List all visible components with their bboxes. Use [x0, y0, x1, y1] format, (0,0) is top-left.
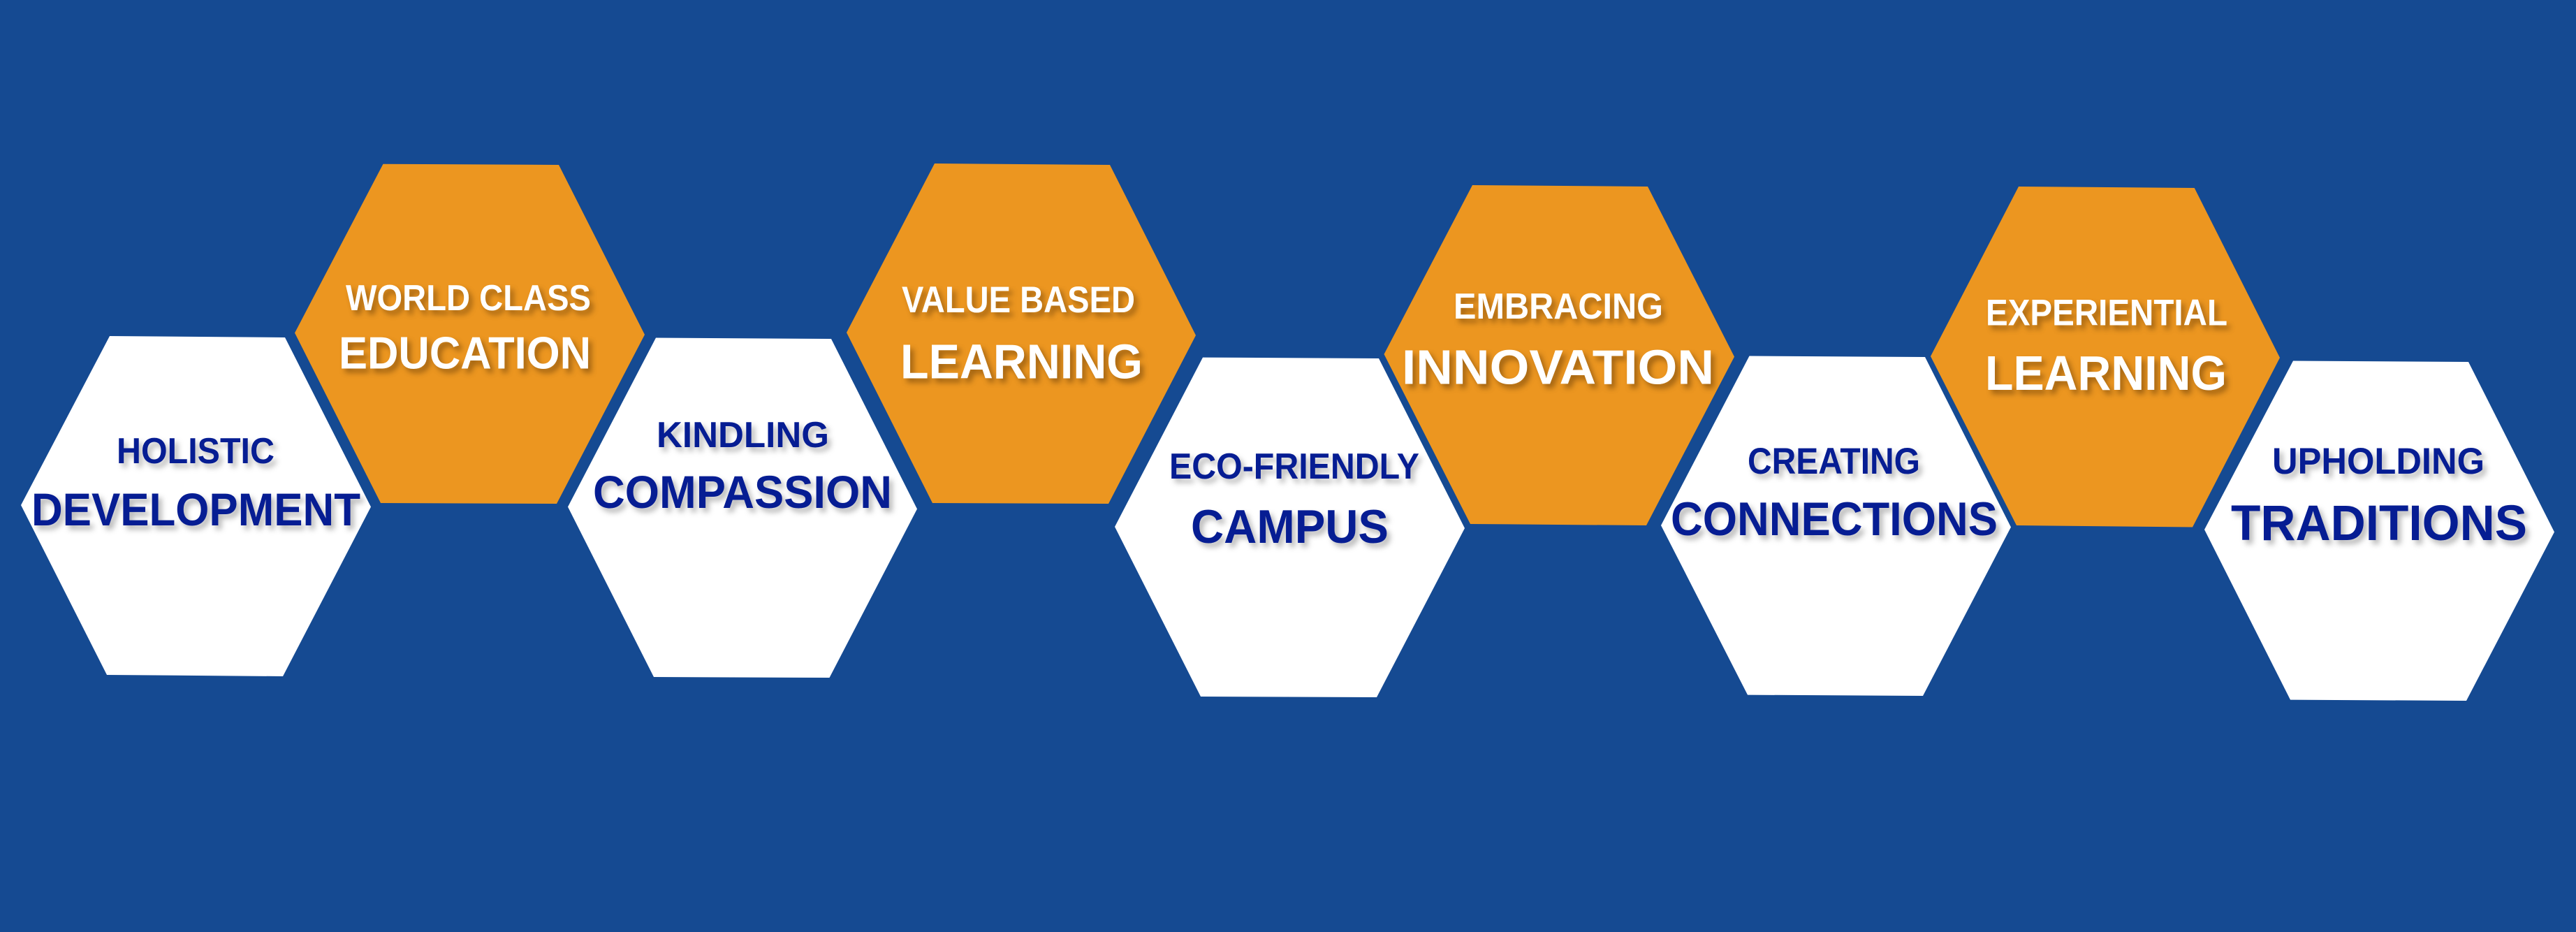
panel: value based learning	[847, 163, 1196, 504]
hexagon: white 3	[568, 338, 917, 678]
hexagon: white 5	[1115, 358, 1465, 697]
heading: learning: LEARNING	[1985, 346, 2227, 400]
hexagon: orange 2	[295, 164, 645, 504]
heading: learning: LEARNING	[900, 334, 1143, 388]
hexagon: white 9	[2204, 361, 2554, 701]
heading: creating: CREATING	[1748, 441, 1920, 482]
hexagon: orange 4	[847, 163, 1196, 504]
heading: connections: CONNECTIONS	[1671, 493, 1998, 546]
heading: compassion: COMPASSION	[593, 466, 892, 518]
panel: world class education	[295, 164, 645, 504]
heading: eco-friendly: ECO-FRIENDLY	[1169, 446, 1419, 487]
panel: eco-friendly campus	[1115, 358, 1465, 697]
heading: world class: WORLD CLASS	[346, 278, 591, 319]
heading: value based: VALUE BASED	[902, 279, 1135, 321]
heading: campus: CAMPUS	[1191, 500, 1389, 553]
hexagon: white 1	[21, 336, 371, 676]
heading: upholding: UPHOLDING	[2272, 441, 2484, 482]
heading: experiential: EXPERIENTIAL	[1986, 293, 2227, 334]
panel: embracing innovation	[1384, 185, 1734, 525]
panel: upholding traditions	[2204, 361, 2554, 701]
panel: experiential learning	[1931, 187, 2280, 527]
hexagon: white 7	[1661, 356, 2011, 696]
heading: traditions: TRADITIONS	[2231, 496, 2527, 551]
heading: innovation: INNOVATION	[1402, 340, 1714, 394]
heading: kindling: KINDLING	[657, 415, 829, 456]
hexagon: orange 6	[1384, 185, 1734, 525]
panel: kindling compassion	[568, 338, 917, 678]
hexagon: orange 8	[1931, 187, 2280, 527]
panel: holistic development	[21, 336, 371, 676]
heading: education: EDUCATION	[339, 327, 591, 379]
heading: embracing: EMBRACING	[1454, 286, 1663, 327]
heading: development: DEVELOPMENT	[31, 483, 360, 535]
panel: creating connections	[1661, 356, 2011, 696]
heading: holistic: HOLISTIC	[117, 431, 275, 472]
